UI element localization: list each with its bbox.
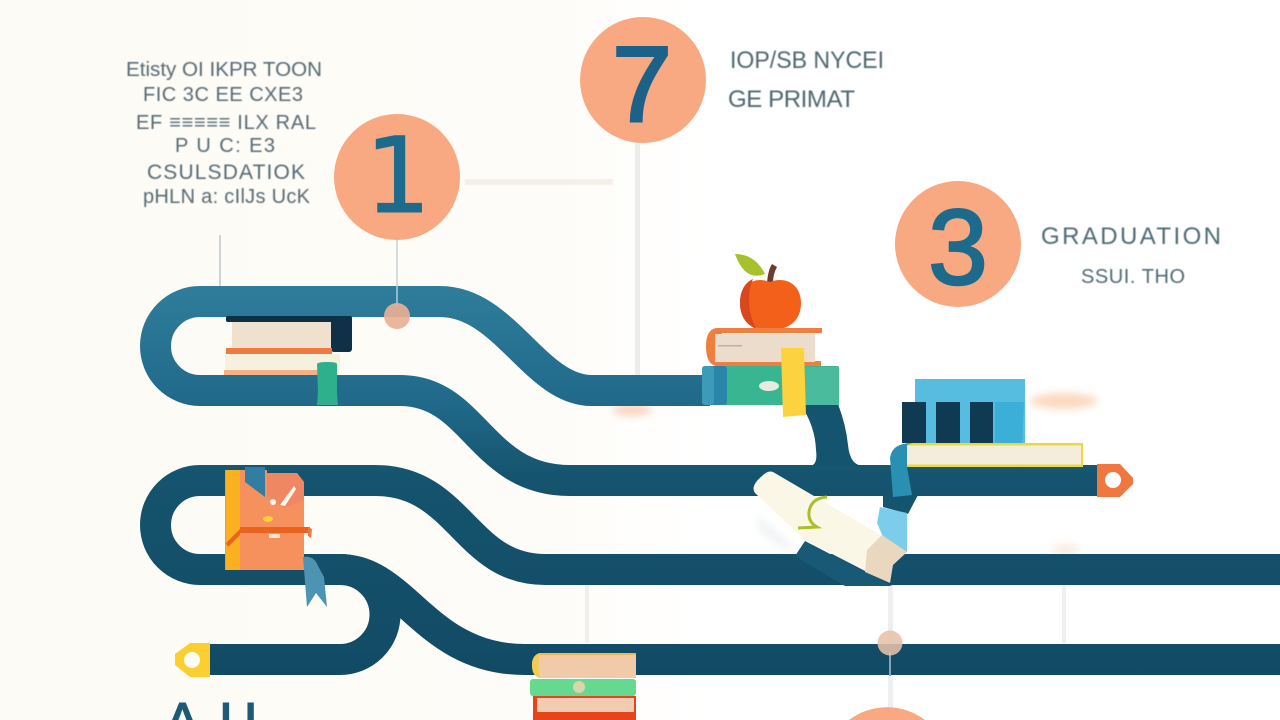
bottom book stack	[530, 653, 636, 720]
step 1 badge	[334, 114, 460, 240]
book stack: first open book	[224, 316, 352, 405]
orange backpack book	[225, 467, 327, 607]
step 7 description text	[728, 47, 884, 113]
milestone dot on upper track	[384, 303, 410, 329]
step 7 description text: IOP/SB NYCEI	[730, 47, 884, 74]
step 3 description text: GRADUATION	[1041, 223, 1221, 250]
step 1 badge: 1	[365, 115, 431, 237]
step 1 description text: CSULSDATIOK	[147, 161, 305, 184]
leaf	[735, 254, 765, 276]
rolled diploma scroll	[754, 472, 907, 583]
end cap: yellow marker	[175, 643, 210, 677]
step 7 description text: GE PRIMAT	[728, 86, 855, 113]
milestone dot on lower track	[878, 630, 902, 656]
line crossing upper track	[396, 286, 398, 306]
end cap: orange marker	[1097, 464, 1133, 497]
book stack: orange and green books	[702, 328, 839, 417]
branch connector between rows	[800, 404, 864, 466]
step 1 description text	[126, 59, 322, 208]
step 1 description text: P U C: E3	[175, 135, 275, 157]
step 1 description text: Etisty OI IKPR TOON	[126, 59, 322, 81]
connector lines	[219, 142, 1066, 720]
step 1 description text: FIC 3C EE CXE3	[143, 84, 303, 106]
step 3 badge	[895, 181, 1021, 307]
step 3 description text: SSUI. THO	[1081, 266, 1185, 288]
step 7 badge: 7	[612, 24, 672, 144]
step 7 badge	[580, 17, 706, 144]
blue ribbon	[303, 557, 327, 607]
yellow bookmark	[781, 348, 806, 417]
line crossing lower track	[889, 652, 891, 676]
apple on books	[735, 254, 801, 330]
green bookmark	[317, 362, 338, 405]
winding road track	[156, 302, 1280, 660]
step 3 badge: 3	[928, 187, 988, 307]
soft orange highlights	[612, 393, 1098, 553]
scroll shadow	[758, 515, 795, 550]
book stack: blue and cream books	[890, 379, 1083, 497]
step 1 description text: pHLN a: cIlJs UcK	[143, 186, 311, 208]
bottom step badge	[849, 707, 925, 720]
step 3 description text	[1041, 223, 1221, 288]
step 1 description text: EF ≡≡≡≡≡ ILX RAL	[136, 112, 316, 134]
